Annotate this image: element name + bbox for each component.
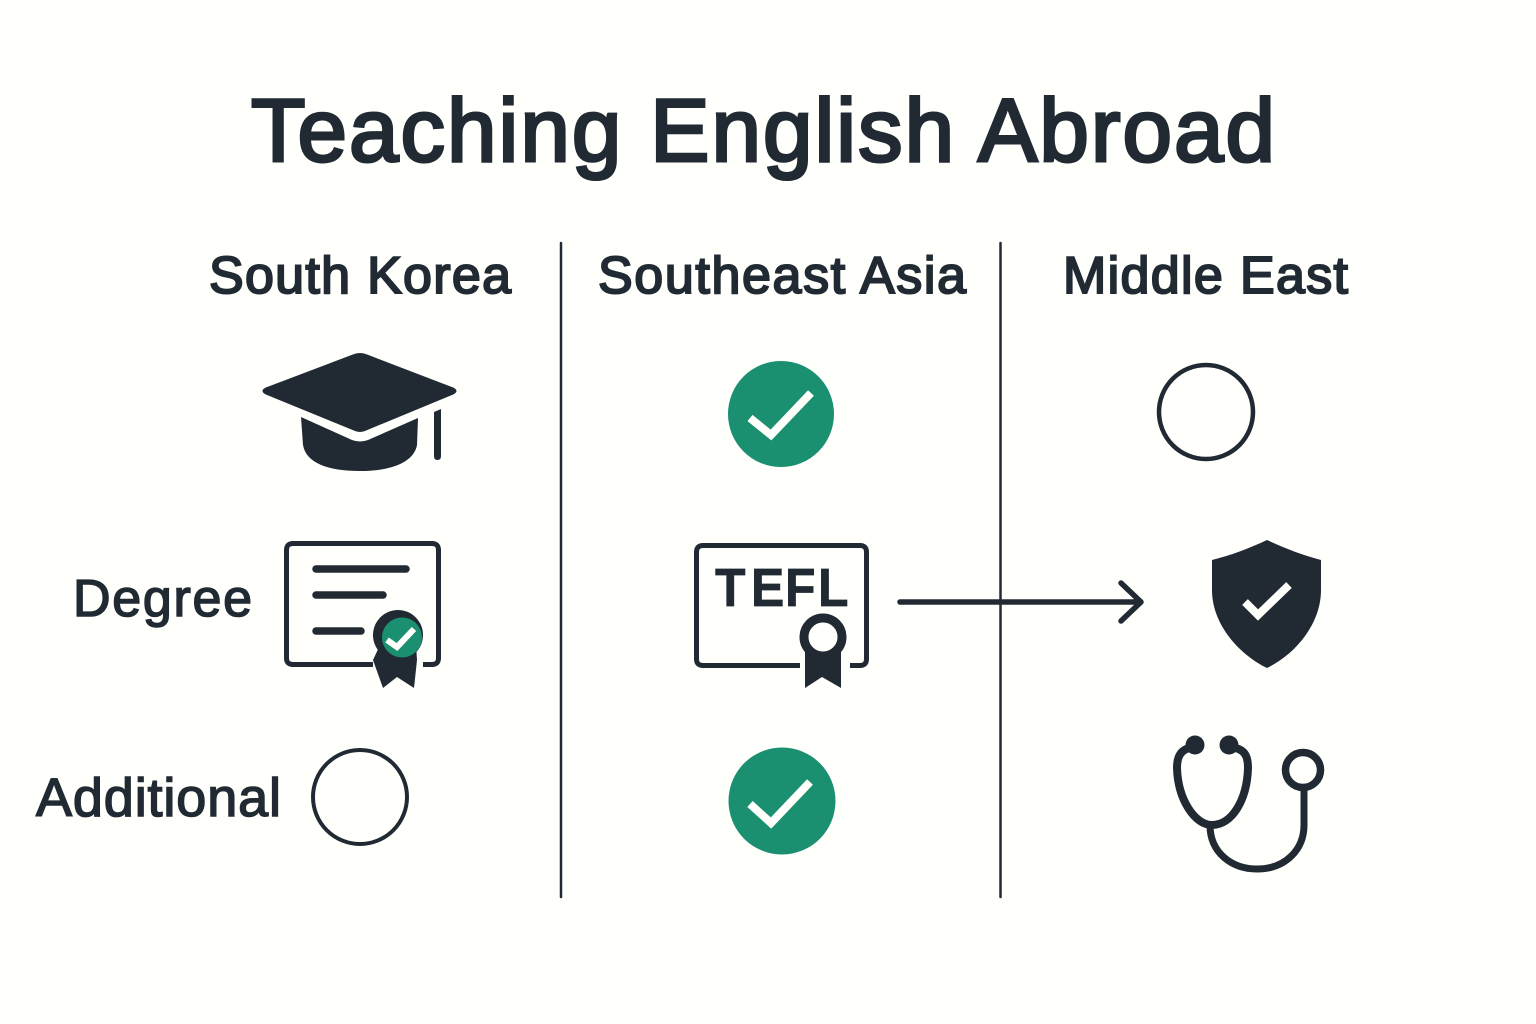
title: Teaching English Abroad [251, 80, 1275, 180]
icon: empty circle, South Korea additional [313, 750, 407, 844]
arrow: Southeast Asia to Middle East [900, 583, 1141, 621]
heading: Middle East: Middle East [1063, 247, 1349, 305]
heading: Southeast Asia: Southeast Asia [598, 247, 966, 305]
icon: stethoscope [1177, 736, 1320, 869]
row label: Degree: Degree [73, 570, 252, 628]
icon: TEFL certificate with ribbon: TEFL [715, 558, 849, 618]
heading: South Korea: South Korea [209, 247, 511, 305]
icon: green check, Southeast Asia additional [728, 748, 836, 854]
icon: green check, Southeast Asia degree [728, 361, 834, 467]
icon: degree certificate with check badge [286, 544, 438, 688]
icon: graduation cap [263, 354, 456, 471]
icon: shield with check [1212, 540, 1321, 668]
row label: Additional: Additional [36, 768, 281, 828]
icon: TEFL certificate with ribbon [696, 546, 866, 688]
icon: empty circle, Middle East degree [1159, 365, 1253, 459]
